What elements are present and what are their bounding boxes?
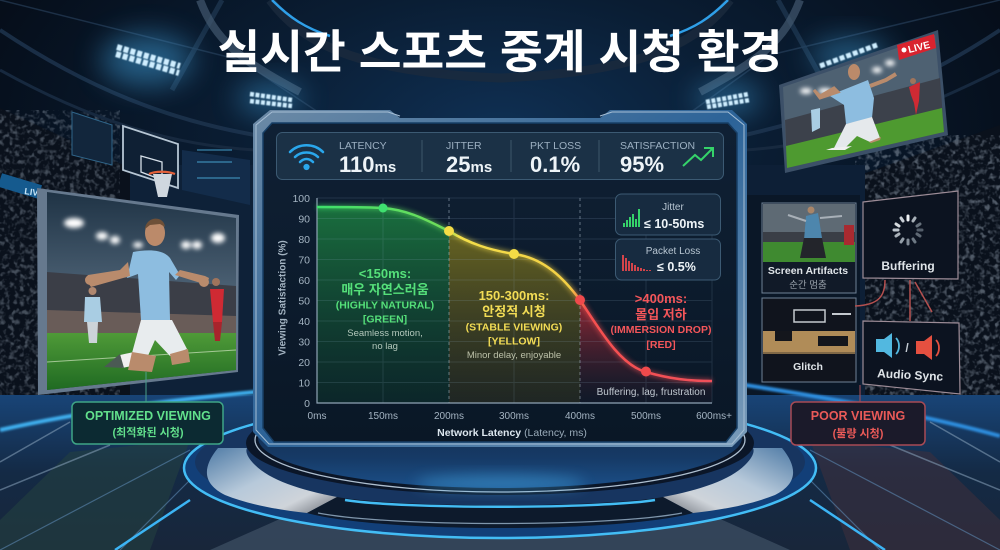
connector lines — [855, 280, 932, 321]
zone label: yellow: [YELLOW] — [488, 336, 540, 348]
jitter target card — [616, 194, 720, 235]
metric: satisfaction: 95% — [620, 152, 664, 177]
issue card: glitch — [762, 298, 856, 382]
zone label: yellow: 안정적 시청 — [482, 304, 546, 319]
player — [811, 64, 920, 150]
main player — [85, 219, 209, 372]
zone label: yellow: (STABLE VIEWING) — [466, 322, 562, 334]
y axis labels: 100 — [292, 193, 310, 205]
y axis labels: 70 — [298, 254, 310, 266]
x axis labels: 150ms — [368, 411, 398, 422]
roof arches with blue neon — [200, 0, 800, 92]
metric: latency — [339, 140, 396, 177]
pitch — [47, 333, 236, 390]
icon: trend arrow — [683, 148, 713, 166]
callout: poor viewing: (불량 시청) — [833, 426, 884, 440]
y axis labels: 90 — [298, 214, 310, 226]
zone label: yellow — [466, 288, 562, 361]
callout: poor viewing — [791, 385, 925, 445]
zone label: red: [RED] — [646, 339, 676, 351]
issue card: screen artifacts — [762, 203, 856, 293]
icon: red decay bars — [623, 255, 650, 271]
icon: red speaker — [916, 335, 932, 360]
jitter target card: Jitter — [662, 202, 685, 213]
metal segment right — [663, 448, 793, 513]
issue card: audio sync: Audio Sync — [877, 366, 944, 384]
x axis title: Network Latency (Latency, ms) — [437, 427, 587, 439]
x axis labels: 500ms — [631, 411, 661, 422]
metrics bar — [276, 132, 724, 180]
screen lights — [800, 60, 895, 94]
y axis labels — [292, 193, 310, 410]
title: 실시간 스포츠 중계 시청 환경 — [218, 26, 782, 78]
issue card: audio sync: / — [905, 341, 909, 355]
x axis labels: 200ms — [434, 411, 464, 422]
metric: jitter: JITTER — [446, 140, 482, 152]
issue card: buffering — [863, 191, 958, 279]
callout: optimized viewing — [72, 372, 223, 444]
metric: satisfaction: SATISFACTION — [620, 140, 695, 152]
data points — [378, 204, 651, 376]
metric: packet loss — [530, 140, 581, 177]
distant players — [84, 278, 224, 343]
y axis labels: 10 — [298, 378, 310, 390]
pedestal — [184, 388, 816, 538]
zone label: green — [336, 266, 434, 352]
issue card: screen artifacts: 순간 멈춤 — [789, 280, 827, 291]
packet loss target card: Packet Loss — [646, 246, 700, 257]
y axis labels: 20 — [298, 357, 310, 369]
metric: satisfaction — [620, 140, 695, 177]
main dashboard panel — [253, 110, 747, 449]
metric: jitter — [446, 140, 492, 177]
zone label: yellow: 150-300ms: — [479, 288, 549, 303]
y axis labels: 50 — [298, 296, 310, 308]
icon: blue speaker — [876, 333, 892, 358]
left scene: basketball backboard: LIV — [24, 186, 39, 198]
annotation: buffering: Buffering, lag, frustration — [597, 387, 705, 398]
metric: packet loss: PKT LOSS — [530, 140, 581, 152]
floor — [0, 385, 1000, 550]
jitter target card: ≤ 10-50ms — [644, 217, 704, 231]
y axis labels: 60 — [298, 275, 310, 287]
issue card: glitch: Glitch — [793, 361, 823, 373]
x axis labels — [308, 411, 732, 422]
metric: jitter: 25ms — [446, 152, 492, 177]
zone label: green: no lag — [372, 341, 398, 352]
issue card: audio sync — [863, 321, 960, 394]
x axis labels: 400ms — [565, 411, 595, 422]
zone label: red: (IMMERSION DROP) — [611, 324, 711, 336]
screen lights — [64, 218, 225, 249]
zone label: green: <150ms: — [359, 266, 411, 281]
left broadcast screen — [37, 188, 239, 395]
icon: green bars — [624, 209, 639, 227]
zone label: green: [GREEN] — [363, 314, 407, 326]
zone label: red: 몰입 저하 — [635, 307, 687, 322]
metric: latency: LATENCY — [339, 140, 387, 152]
callout: poor viewing: POOR VIEWING — [811, 409, 905, 423]
x axis labels: 0ms — [308, 411, 326, 422]
zone label: red — [611, 291, 711, 351]
callout: optimized viewing: OPTIMIZED VIEWING — [85, 409, 211, 423]
y axis labels: 80 — [298, 234, 310, 246]
zone label: green: Seamless motion, — [347, 328, 423, 339]
live badge: LIVE — [907, 40, 932, 56]
y axis labels: 0 — [304, 398, 310, 410]
metric: packet loss: 0.1% — [530, 152, 580, 177]
x axis labels: 600ms+ — [696, 411, 732, 422]
left scene: basketball backboard — [0, 112, 250, 205]
zone label: red: >400ms: — [635, 291, 687, 306]
line chart — [278, 193, 732, 439]
y axis title: Viewing Satisfaction (%) — [278, 240, 288, 356]
zone label: green: (HIGHLY NATURAL) — [336, 300, 434, 312]
y axis labels: 40 — [298, 316, 310, 328]
metric: latency: 110ms — [339, 152, 396, 177]
packet loss target card — [616, 239, 720, 280]
stadium floodlights — [101, 34, 890, 114]
packet loss target card: ≤ 0.5% — [657, 260, 696, 274]
callout: optimized viewing: (최적화된 시청) — [112, 425, 184, 439]
icon: wifi — [290, 145, 323, 169]
issue card: buffering: Buffering — [881, 259, 935, 273]
stadium crowd in screen — [47, 272, 236, 333]
live badge — [897, 34, 936, 60]
y axis labels: 30 — [298, 336, 310, 348]
zone label: yellow: Minor delay, enjoyable — [467, 350, 561, 361]
icon: spinner — [894, 216, 922, 244]
metal segment left — [207, 448, 337, 513]
right top broadcast screen — [779, 30, 948, 173]
issue card: screen artifacts: Screen Artifacts — [768, 265, 848, 277]
zone label: green: 매우 자연스러움 — [341, 282, 429, 297]
x axis labels: 300ms — [499, 411, 529, 422]
